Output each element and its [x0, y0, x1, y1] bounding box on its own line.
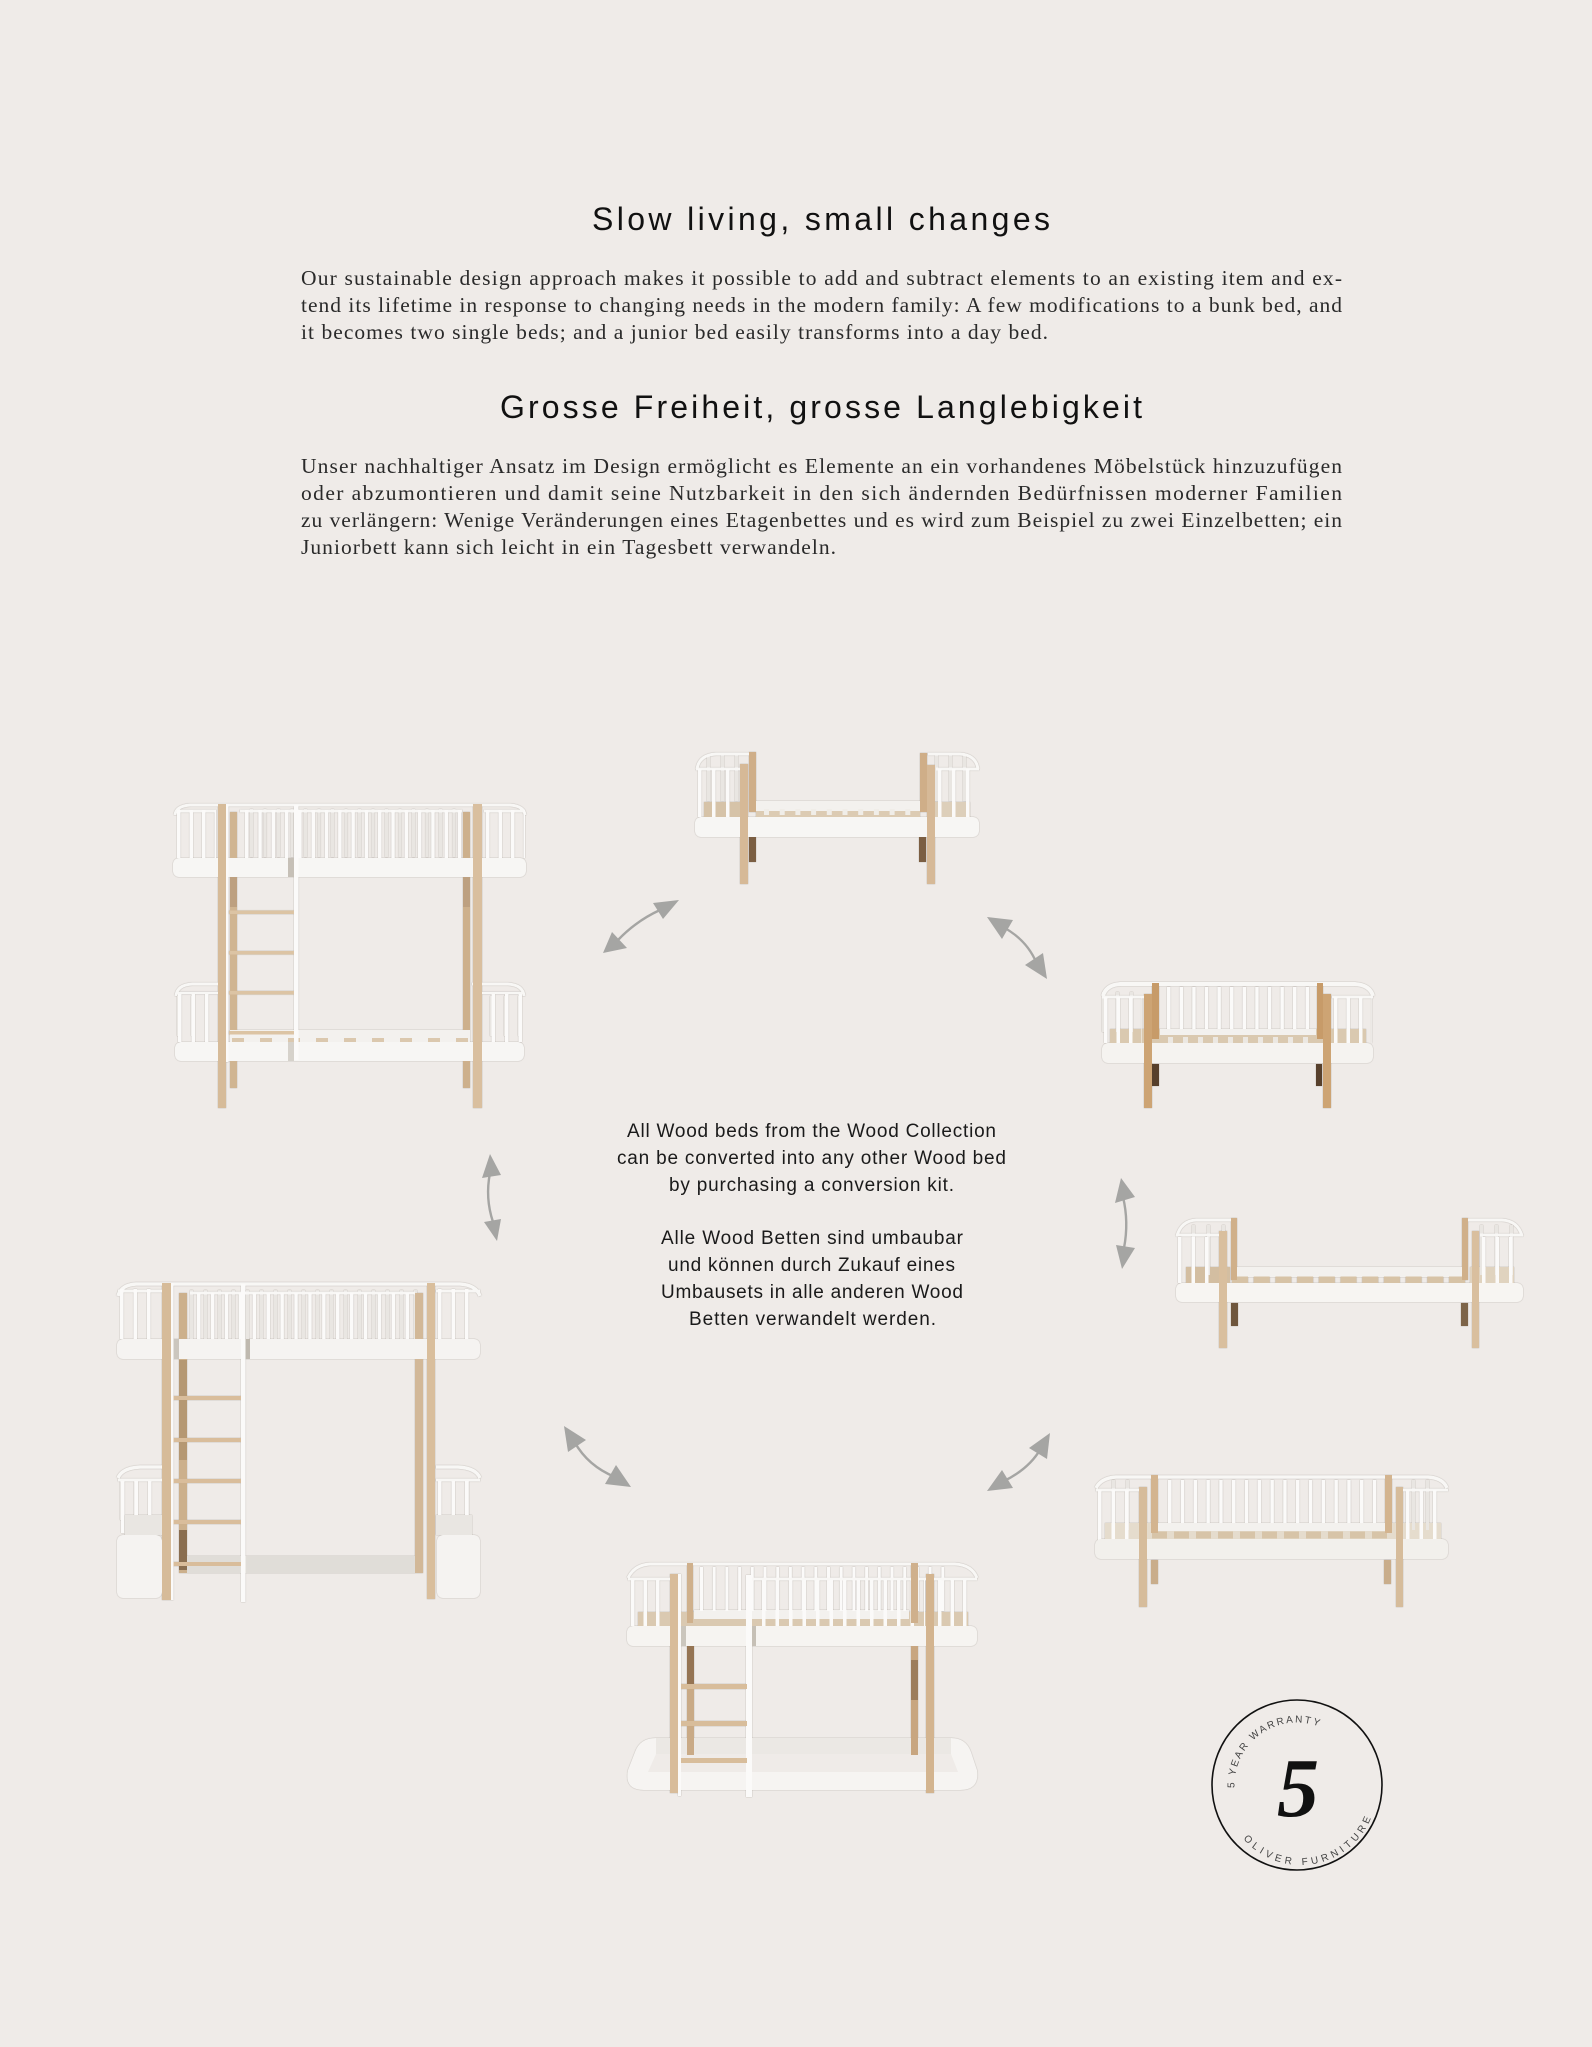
bed: single bed with end rails [695, 752, 979, 884]
badge: 5 year warranty [1211, 1699, 1383, 1871]
arrow: bunk to single [603, 900, 679, 953]
text block: German intro: Unser nachhaltiger Ansatz im Design ermöglicht es Elemente an ein vorhandenes Möbelstück hinzuzufügen [301, 454, 1342, 478]
text block: English intro: Our sustainable design approach makes it possible to add and subtract elements to an existing item and ex- [301, 266, 1342, 290]
bed: oak day bed [1102, 983, 1373, 1108]
text block: conversion kit note: can be converted into any other Wood bed [617, 1148, 1006, 1169]
text block: conversion kit note: by purchasing a conversion kit. [669, 1175, 954, 1196]
text block: conversion kit note: Umbausets in alle anderen Wood [661, 1282, 963, 1303]
arrow: bunk to loft [482, 1154, 501, 1241]
text block: English intro [301, 266, 1342, 344]
arrow: loft to mid-height bed [564, 1426, 631, 1487]
text block: conversion kit note [617, 1121, 1006, 1330]
bed: day bed with back rail [1095, 1475, 1448, 1607]
text block: German intro: oder abzumontieren und damit seine Nutzbarkeit in den sich ändernden Bedürfnissen moderner Familien [301, 481, 1342, 505]
text block: German intro: Juniorbett kann sich leicht in ein Tagesbett verwandeln. [301, 535, 836, 559]
text block: conversion kit note: Betten verwandelt werden. [689, 1309, 936, 1330]
arrow: mid-height bed to day bed [987, 1433, 1050, 1491]
heading: German: Grosse Freiheit, grosse Langlebigkeit [500, 389, 1142, 425]
text block: German intro [301, 454, 1342, 559]
badge: 5 year warranty: 5 YEAR WARRANTY [1228, 1716, 1320, 1788]
arrow: day bed to single [1115, 1178, 1135, 1269]
text block: German intro: zu verlängern: Wenige Veränderungen eines Etagenbettes und es wird zum Beispiel zu zwei Einzelbetten; ein [301, 508, 1342, 532]
text block: conversion kit note: All Wood beds from the Wood Collection [627, 1121, 996, 1142]
heading: English: Slow living, small changes [592, 201, 1050, 237]
bed: bunk bed [173, 804, 526, 1108]
badge: 5 year warranty: 5 [1277, 1742, 1319, 1835]
bed: high loft with storage ends [117, 1283, 480, 1602]
bed: mid-height bed with floor frame [627, 1563, 977, 1797]
text block: conversion kit note: und können durch Zukauf eines [668, 1255, 955, 1276]
text block: English intro: it becomes two single beds; and a junior bed easily transforms into a day bed. [301, 320, 1048, 344]
arrow: single to junior day bed [987, 917, 1047, 979]
bed: long single bed [1176, 1218, 1523, 1348]
text block: conversion kit note: Alle Wood Betten sind umbaubar [661, 1228, 964, 1249]
text block: English intro: tend its lifetime in response to changing needs in the modern family: A few modifications to a bunk bed, and [301, 293, 1342, 317]
badge: 5 year warranty: OLIVER FURNITURE [1244, 1816, 1371, 1865]
